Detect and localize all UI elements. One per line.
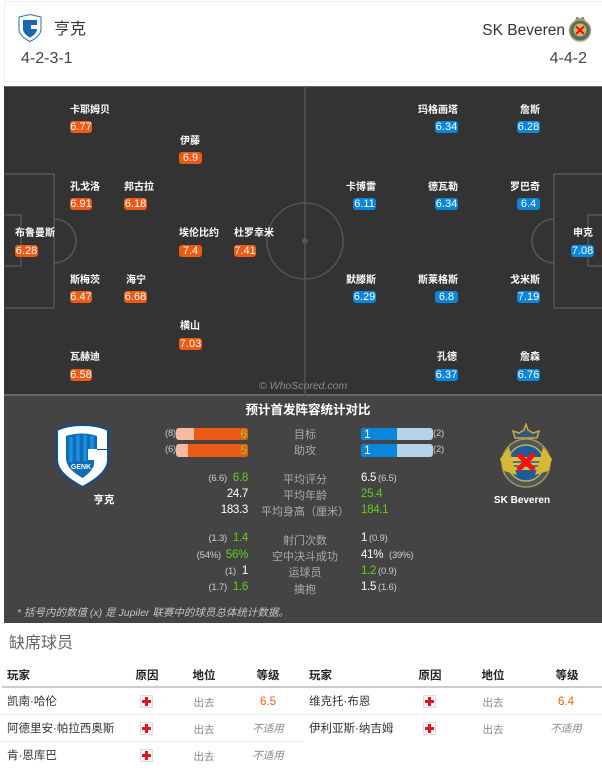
home goals bar bbox=[176, 428, 248, 440]
player: 孔戈洛 bbox=[70, 182, 100, 193]
table header: 原因 bbox=[136, 670, 158, 682]
row: 维克托·布恩 bbox=[309, 696, 370, 708]
table header bbox=[2, 667, 303, 688]
player: 6.77 bbox=[70, 121, 92, 133]
player: 卡耶姆贝 bbox=[70, 105, 110, 116]
home stat values: 6.8 bbox=[233, 472, 248, 484]
home players bbox=[15, 104, 274, 381]
away stat values: (6.5) bbox=[378, 473, 397, 484]
player: 戈米斯 bbox=[510, 275, 540, 286]
player: 申克 bbox=[573, 228, 593, 239]
table header bbox=[301, 667, 602, 688]
player: 布鲁曼斯 bbox=[15, 228, 55, 239]
player: 6.34 bbox=[436, 121, 457, 133]
home stat values: 1.4 bbox=[233, 532, 248, 544]
player: 卡博雷 bbox=[346, 182, 376, 193]
home prior assists: (6) bbox=[165, 444, 176, 455]
player bbox=[510, 274, 540, 303]
assists comparison bbox=[165, 444, 444, 457]
stat labels: 助攻 bbox=[294, 445, 316, 457]
player bbox=[70, 181, 100, 210]
row: 不适用 bbox=[252, 750, 284, 762]
table header: 等级 bbox=[556, 670, 578, 682]
stats heading: 预计首发阵容统计对比 bbox=[245, 403, 370, 417]
player bbox=[435, 351, 458, 381]
player: 伊藤 bbox=[180, 136, 200, 147]
row: 6.5 bbox=[260, 696, 276, 708]
player: 7.19 bbox=[518, 291, 539, 303]
home assists bar bbox=[176, 444, 248, 457]
table header: 玩家 bbox=[309, 670, 332, 682]
player bbox=[517, 351, 540, 381]
icon: Genk crest: GENK bbox=[71, 464, 91, 471]
table header: 玩家 bbox=[7, 670, 30, 682]
icon: Beveren crest bbox=[500, 423, 552, 488]
player: 6.29 bbox=[354, 291, 375, 303]
away players bbox=[346, 104, 594, 381]
home team label: 亨克 bbox=[94, 494, 114, 506]
player bbox=[70, 351, 100, 381]
stat labels: 平均评分 bbox=[283, 474, 327, 486]
table header: 地位 bbox=[192, 670, 216, 682]
home stat values: 1.6 bbox=[233, 581, 248, 593]
away stat values: 1.5 bbox=[361, 581, 376, 593]
player: 詹斯 bbox=[520, 105, 540, 116]
row bbox=[7, 749, 284, 763]
player: 6.91 bbox=[70, 198, 92, 210]
icon: Genk crest small bbox=[18, 14, 42, 42]
player: 罗巴奇 bbox=[510, 182, 540, 193]
row: 凯南·哈伦 bbox=[7, 696, 57, 708]
player: 海宁 bbox=[126, 275, 146, 286]
away assists bar bbox=[361, 444, 433, 457]
player: 7.4 bbox=[183, 245, 198, 257]
player bbox=[70, 104, 110, 133]
player: 玛格画塔 bbox=[418, 105, 458, 116]
player: 6.9 bbox=[183, 152, 198, 164]
row bbox=[2, 688, 303, 715]
row: 伊利亚斯·纳吉姆 bbox=[309, 723, 393, 735]
panel: match header bbox=[4, 1, 602, 82]
away stat values: 1 bbox=[361, 532, 367, 544]
player: 6.47 bbox=[70, 291, 92, 303]
away stat values: 1.2 bbox=[361, 565, 376, 577]
row: 出去 bbox=[194, 724, 214, 736]
panel: lineup stats comparison bbox=[4, 396, 602, 623]
player: 斯梅茨 bbox=[70, 275, 100, 286]
stat labels: 运球员 bbox=[288, 567, 322, 579]
away team name: SK Beveren bbox=[482, 22, 565, 39]
away goals bar bbox=[361, 428, 433, 440]
player bbox=[428, 181, 458, 210]
player: 瓦赫迪 bbox=[70, 352, 100, 363]
away formation: 4-4-2 bbox=[550, 50, 587, 67]
icon: Beveren crest small bbox=[568, 16, 592, 42]
away team label: SK Beveren bbox=[494, 495, 550, 506]
player: 6.8 bbox=[439, 291, 454, 303]
table header: 原因 bbox=[418, 670, 442, 682]
stat labels: 目标 bbox=[294, 429, 316, 441]
stat labels: 擒抱 bbox=[294, 584, 316, 596]
home stat values: (6.6) bbox=[208, 473, 227, 484]
player bbox=[517, 104, 540, 133]
home stat values: 56% bbox=[226, 549, 248, 561]
player: 6.37 bbox=[436, 369, 457, 381]
away stat values: (39%) bbox=[389, 550, 413, 561]
player bbox=[346, 274, 376, 303]
away stat values: (1.6) bbox=[378, 582, 397, 593]
player: 6.76 bbox=[518, 369, 539, 381]
away stat values: 6.5 bbox=[361, 472, 376, 484]
player: 6.68 bbox=[125, 291, 146, 303]
table header: 地位 bbox=[482, 670, 504, 682]
row: 不适用 bbox=[252, 723, 284, 735]
row bbox=[309, 722, 582, 736]
player bbox=[124, 180, 154, 210]
missing players table: home bbox=[2, 669, 303, 763]
row: 6.4 bbox=[558, 696, 574, 708]
player: 6.58 bbox=[70, 369, 92, 381]
row: 出去 bbox=[194, 751, 214, 763]
player: 横山 bbox=[180, 321, 200, 332]
player: 7.03 bbox=[180, 338, 201, 350]
player: 孔德 bbox=[437, 352, 457, 363]
missing players heading: 缺席球员 bbox=[9, 635, 73, 652]
home stat values: 1 bbox=[242, 565, 248, 577]
row: 出去 bbox=[482, 724, 504, 736]
pitch markings bbox=[4, 86, 602, 396]
player bbox=[179, 135, 202, 164]
player: 6.34 bbox=[436, 198, 457, 210]
home stat values: (1.7) bbox=[208, 582, 227, 593]
player: 6.28 bbox=[16, 245, 37, 257]
player bbox=[418, 274, 458, 303]
player: 6.18 bbox=[125, 198, 146, 210]
home stat values: 183.3 bbox=[221, 504, 248, 516]
stat labels: 平均身高（厘米） bbox=[261, 506, 349, 518]
player: 杜罗幸米 bbox=[234, 228, 274, 239]
player: 邦古拉 bbox=[124, 182, 154, 193]
stat labels: 射门次数 bbox=[283, 535, 327, 547]
player bbox=[179, 320, 202, 350]
away prior goals: (2) bbox=[433, 428, 444, 439]
goals comparison bbox=[165, 428, 444, 440]
player bbox=[70, 274, 100, 303]
home stat values: (54%) bbox=[197, 550, 221, 561]
home team name: 亨克 bbox=[54, 21, 86, 38]
stat labels bbox=[261, 428, 349, 596]
table header: 等级 bbox=[256, 670, 280, 682]
row: 肯·恩库巴 bbox=[7, 750, 57, 762]
home stat values bbox=[197, 472, 248, 593]
player bbox=[418, 104, 458, 133]
player: 詹森 bbox=[520, 352, 540, 363]
player: 德瓦勒 bbox=[428, 182, 458, 193]
row: 不适用 bbox=[550, 723, 582, 735]
row: 出去 bbox=[194, 697, 214, 709]
panel: pitch bbox=[4, 86, 602, 396]
footnote: * 括号内的数值 (x) 是 Jupiler 联赛中的球员总体统计数据。 bbox=[17, 607, 289, 619]
player: 6.4 bbox=[521, 198, 536, 210]
away stat values: 25.4 bbox=[361, 488, 382, 500]
player: 6.11 bbox=[354, 198, 375, 210]
away stat values: (0.9) bbox=[378, 566, 397, 577]
missing players table: away bbox=[303, 669, 602, 736]
icon: Genk crest bbox=[56, 424, 109, 488]
player bbox=[124, 274, 147, 303]
away stat values bbox=[361, 472, 413, 593]
row bbox=[301, 688, 602, 715]
player bbox=[571, 227, 594, 257]
away prior assists: (2) bbox=[433, 444, 444, 455]
player bbox=[346, 181, 376, 210]
home stat values: (1.3) bbox=[208, 533, 227, 544]
row: 阿德里安·帕拉西奥斯 bbox=[7, 723, 114, 735]
player bbox=[179, 227, 219, 257]
row bbox=[2, 715, 303, 742]
player: 6.28 bbox=[518, 121, 539, 133]
away stat values: 41% bbox=[361, 549, 383, 561]
row: 出去 bbox=[482, 697, 504, 709]
home prior goals: (8) bbox=[165, 428, 176, 439]
stat labels: 空中决斗成功 bbox=[272, 551, 338, 563]
player: 斯莱格斯 bbox=[418, 275, 458, 286]
home stat values: 24.7 bbox=[227, 488, 248, 500]
player bbox=[15, 227, 55, 257]
home stat values: (1) bbox=[225, 566, 236, 577]
player: 7.08 bbox=[572, 245, 593, 257]
player: 默滕斯 bbox=[346, 275, 376, 286]
away stat values: 184.1 bbox=[361, 504, 388, 516]
player: 7.41 bbox=[234, 245, 256, 257]
player bbox=[234, 227, 274, 257]
player: 埃伦比约 bbox=[179, 228, 219, 239]
player bbox=[510, 181, 540, 210]
home formation: 4-2-3-1 bbox=[21, 50, 73, 67]
stat labels: 平均年龄 bbox=[283, 490, 327, 502]
away stat values: (0.9) bbox=[369, 533, 388, 544]
watermark: © WhoScored.com bbox=[259, 380, 347, 392]
